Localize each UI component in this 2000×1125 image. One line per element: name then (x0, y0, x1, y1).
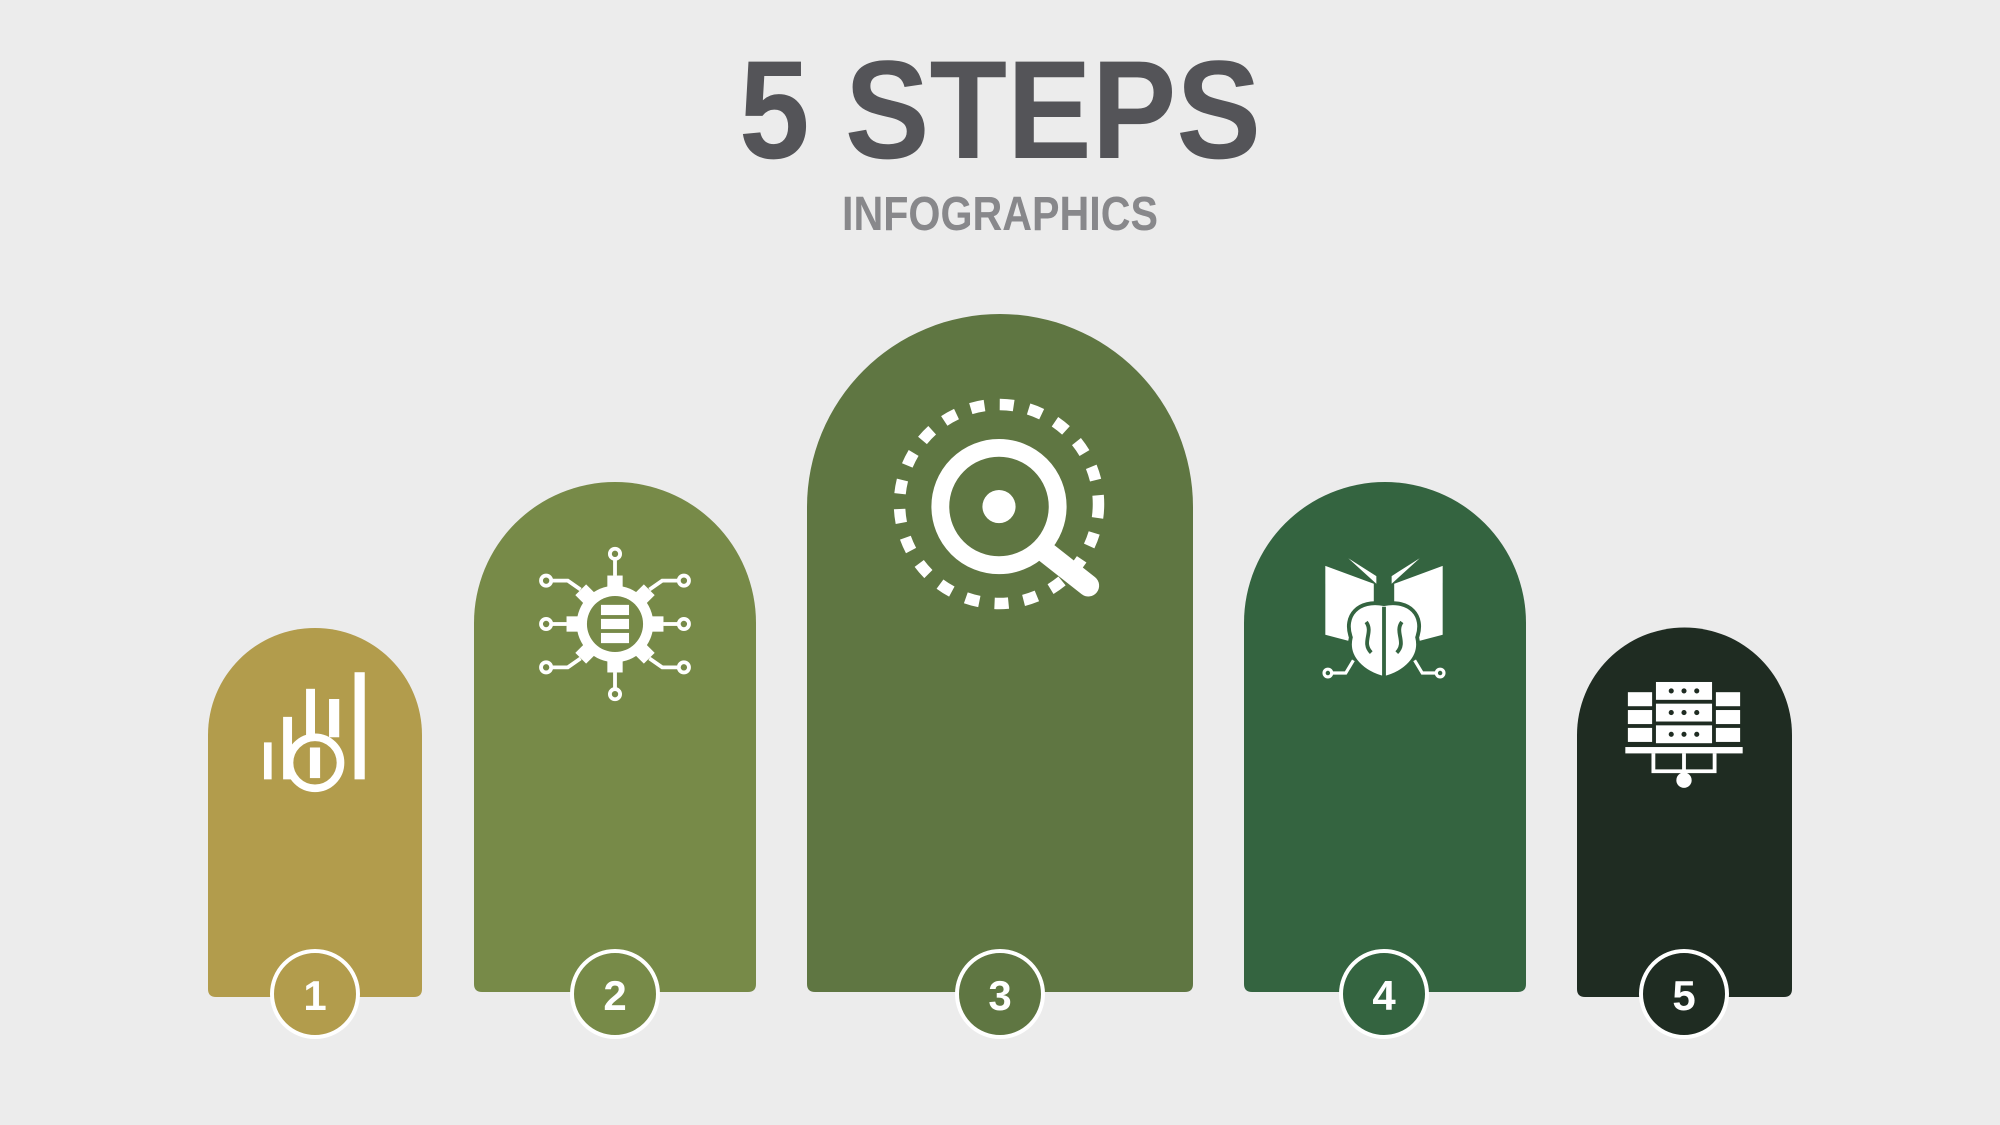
panel: step 2 (474, 482, 756, 1037)
title: 5 STEPS (739, 31, 1261, 188)
number badge 4 (1341, 951, 1427, 1037)
panel: step 5 (1577, 628, 1792, 1037)
number badge 1 (272, 951, 358, 1037)
icon: server network (1625, 682, 1743, 788)
number badge 2: 2 (603, 972, 627, 1019)
number badge 1: 1 (303, 972, 327, 1019)
panel: step 1 (208, 628, 422, 1037)
number badge 2 (572, 951, 658, 1037)
number badge 5 (1641, 951, 1727, 1037)
subtitle: INFOGRAPHICS (842, 188, 1158, 241)
icon: bar chart with magnifier (264, 672, 365, 788)
number badge 4: 4 (1372, 972, 1396, 1019)
icon: magnifier with dashed ring (900, 405, 1098, 603)
icon: gear network (541, 549, 689, 699)
number badge 3 (957, 951, 1043, 1037)
number badge 3: 3 (988, 972, 1012, 1019)
panel: step 3 (807, 314, 1193, 1037)
icon: book with brain (1324, 558, 1444, 678)
panel: step 4 (1244, 482, 1526, 1037)
number badge 5: 5 (1672, 972, 1696, 1019)
